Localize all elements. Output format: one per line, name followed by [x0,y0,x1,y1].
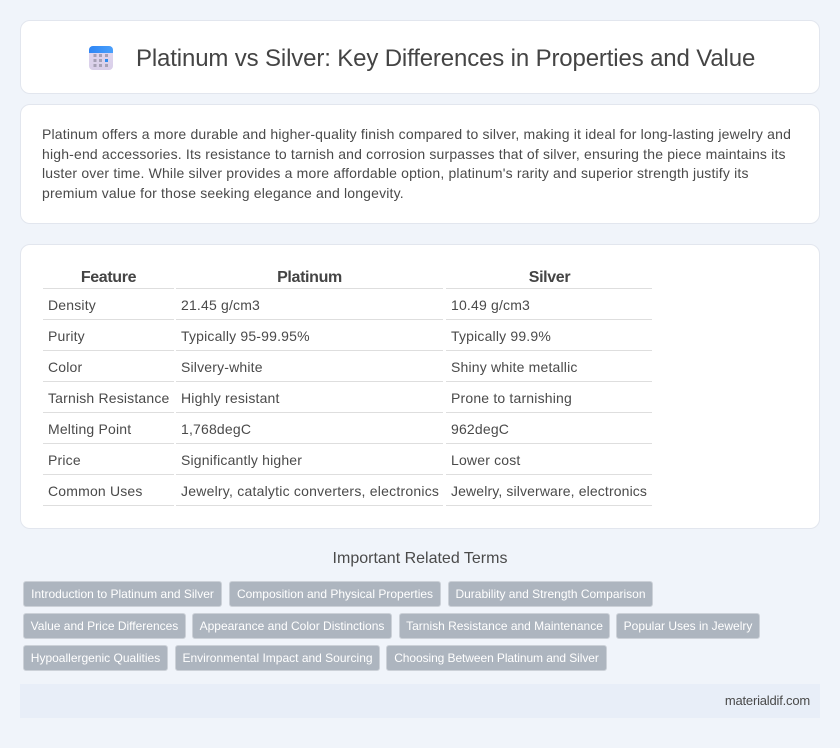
related term tags: Value and Price Differences [31,619,178,633]
comparison table: Platinum [277,269,342,286]
comparison table: Jewelry, silverware, electronics [451,483,647,499]
related term tags: Popular Uses in Jewelry [624,619,752,633]
comparison table: 1,768degC [181,421,251,437]
comparison table: Jewelry, catalytic converters, electronics [181,483,439,499]
source label: materialdif.com [725,693,810,708]
comparison table: Highly resistant [181,390,280,406]
comparison table: Lower cost [451,452,520,468]
comparison table: Silvery-white [181,359,263,375]
comparison table: Typically 95-99.95% [181,328,310,344]
comparison table: Price [48,452,81,468]
summary text: premium value for those seeking elegance and longevity. [42,185,404,201]
comparison table: Prone to tarnishing [451,390,572,406]
header panel [20,20,820,94]
comparison table: Color [48,359,82,375]
comparison table: Shiny white metallic [451,359,578,375]
comparison table [43,269,652,506]
comparison table: Purity [48,328,85,344]
panel: comparison table [20,244,820,529]
comparison table: Feature [81,269,136,286]
comparison table: Silver [529,269,570,286]
summary text: Platinum offers a more durable and higher-quality finish compared to silver, making it ideal for long-lasting jewelry and [42,126,791,142]
comparison table: Common Uses [48,483,143,499]
comparison table: Tarnish Resistance [48,390,170,406]
icon: calendar [89,46,113,70]
related term tags: Introduction to Platinum and Silver [31,587,214,601]
comparison table: 10.49 g/cm3 [451,297,530,313]
summary text: luster over time. While silver provides a more affordable option, platinum's rarity and superior strength justify its [42,165,749,181]
comparison table: 21.45 g/cm3 [181,297,260,313]
related term tags: Hypoallergenic Qualities [31,651,160,665]
summary text: high-end accessories. Its resistance to tarnish and corrosion surpasses that of silver, ensuring the piece maintains its [42,146,786,162]
comparison table: Typically 99.9% [451,328,551,344]
related term tags: Composition and Physical Properties [237,587,433,601]
related terms heading: Important Related Terms [333,550,507,567]
summary text [42,126,791,201]
panel: summary [20,104,820,224]
related term tags: Tarnish Resistance and Maintenance [406,619,603,633]
comparison table: 962degC [451,421,509,437]
comparison table: Significantly higher [181,452,302,468]
comparison table: Density [48,297,96,313]
title: Platinum vs Silver: Key Differences in Properties and Value [136,45,755,72]
related term tags [23,581,760,671]
related term tags: Environmental Impact and Sourcing [182,651,373,665]
related term tags: Appearance and Color Distinctions [200,619,384,633]
comparison table: Melting Point [48,421,131,437]
related term tags: Durability and Strength Comparison [455,587,646,601]
related term tags: Choosing Between Platinum and Silver [394,651,599,665]
footer bar [20,684,820,718]
